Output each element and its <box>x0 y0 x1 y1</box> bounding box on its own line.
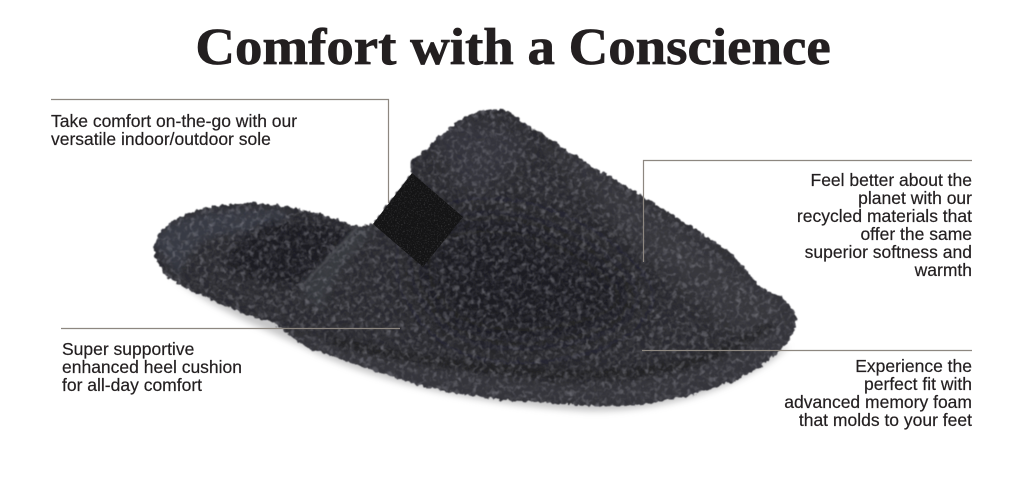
heel seam highlight <box>300 227 358 288</box>
callout: recycled materials: superior softness and <box>805 242 972 262</box>
callout: indoor/outdoor sole: Take comfort on-the-go with our <box>51 111 297 131</box>
callout: memory foam: Experience the <box>855 356 972 376</box>
leather tab <box>373 173 465 269</box>
callout: memory foam: that molds to your feet <box>799 410 972 430</box>
fur texture: dark clumps <box>158 113 764 383</box>
fur texture: light clumps <box>156 110 796 407</box>
title: Comfort with a Conscience <box>195 19 831 76</box>
callout: heel cushion: enhanced heel cushion <box>62 357 242 377</box>
callout: recycled materials <box>797 170 972 280</box>
callout: recycled materials: planet with our <box>858 188 972 208</box>
callout: recycled materials: offer the same <box>860 224 972 244</box>
callout: recycled materials: recycled materials that <box>797 206 972 226</box>
callout: recycled materials: warmth <box>915 260 972 280</box>
slipper <box>140 100 810 420</box>
callout leader lines <box>51 100 972 350</box>
slipper fur body <box>140 100 810 420</box>
callout: recycled materials: Feel better about the <box>810 170 972 190</box>
callout: heel cushion <box>62 339 242 395</box>
slipper illustration <box>51 98 972 414</box>
callout: memory foam: advanced memory foam <box>784 392 972 412</box>
callout: indoor/outdoor sole: versatile indoor/outdoor sole <box>51 129 271 149</box>
callout: heel cushion: for all-day comfort <box>62 375 202 395</box>
callout: memory foam <box>784 356 972 430</box>
callout: memory foam: perfect fit with <box>864 374 972 394</box>
callout: indoor/outdoor sole <box>51 111 297 149</box>
slipper drop shadow <box>170 275 790 411</box>
callout: heel cushion: Super supportive <box>62 339 194 359</box>
